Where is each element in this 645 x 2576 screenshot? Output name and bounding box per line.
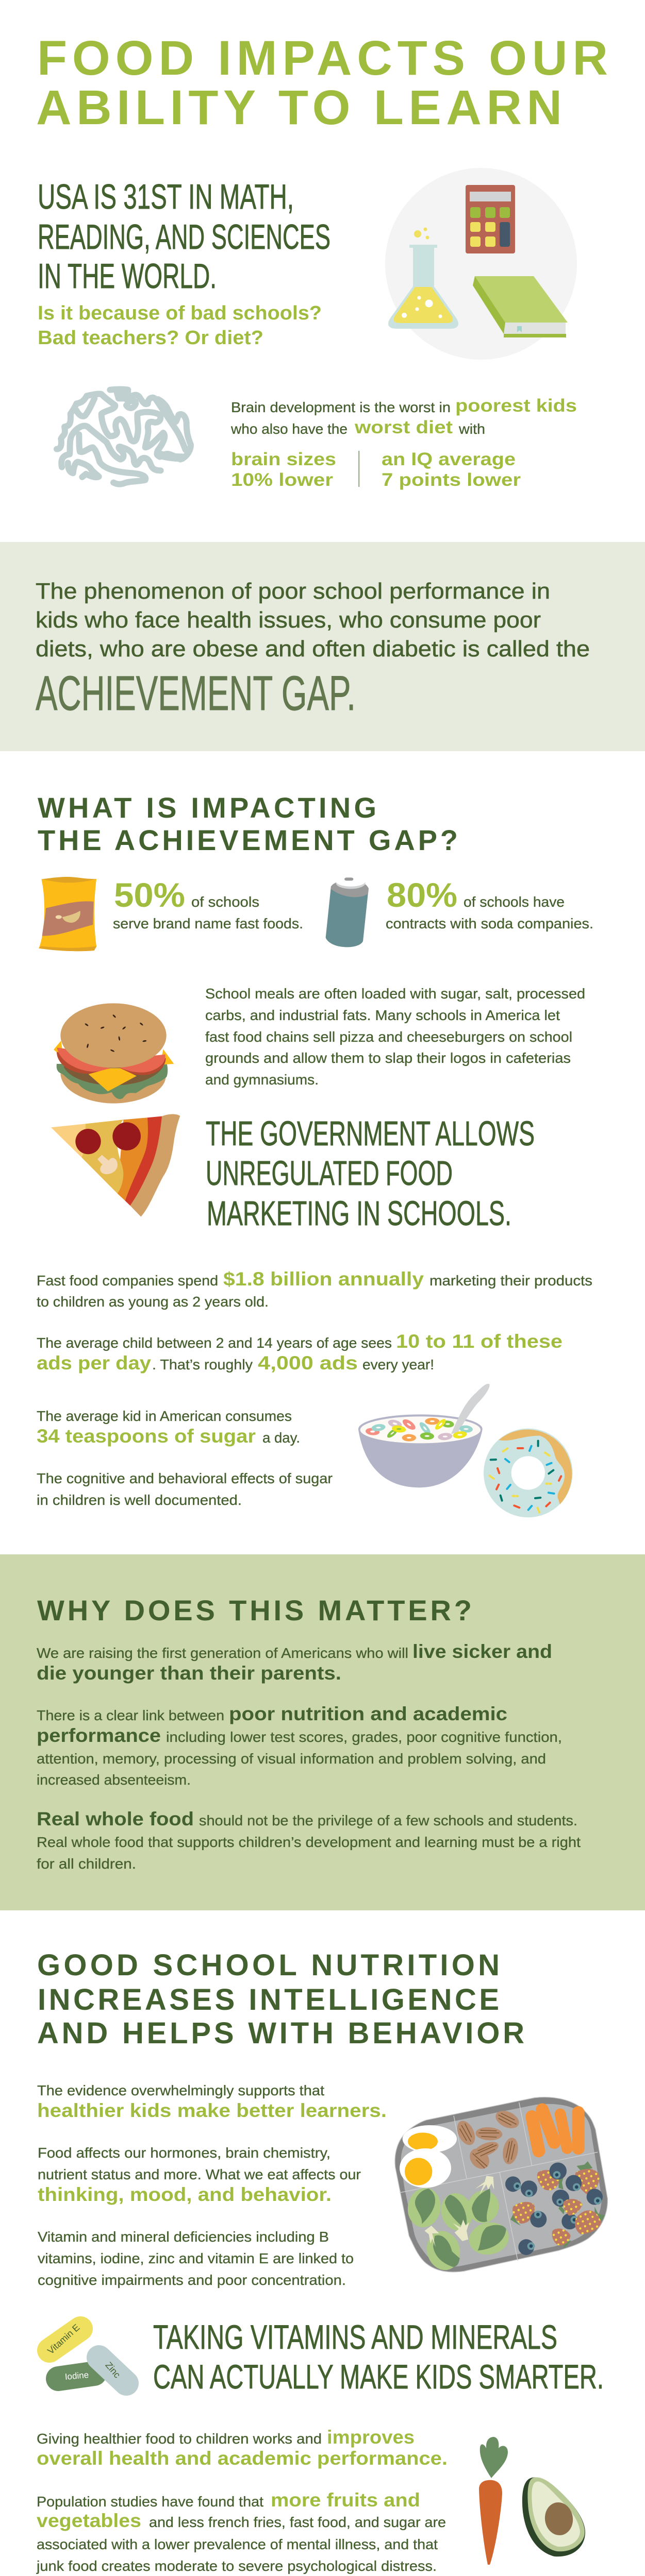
text: food affects: Food affects our hormones, brain chemistry,: [38, 2145, 330, 2161]
icon: eggs: [400, 2125, 457, 2188]
heading: why does this matter: WHY DOES THIS MATTER?: [37, 1594, 472, 1626]
icon: soda can: [326, 876, 369, 947]
text: ads per day: 4,000 ads: [258, 1352, 358, 1374]
text: real whole food: Real whole food: [37, 1808, 194, 1829]
text: healthier food works: [37, 2427, 448, 2469]
text: real whole food: Real whole food that supports children’s development and learning must be a right: [37, 1834, 581, 1850]
heading: what is impacting: THE ACHIEVEMENT GAP?: [38, 824, 458, 856]
text: population studies: associated with a lower prevalence of mental illness, and that: [37, 2536, 438, 2552]
text: nutrition link: performance: [37, 1725, 161, 1746]
text: population studies: more fruits and: [271, 2489, 420, 2511]
text: first generation: [37, 1641, 552, 1684]
text: population studies: [36, 2489, 446, 2574]
icon: lunch tray: [395, 2097, 607, 2274]
stat: 80 percent: of schools have: [464, 894, 565, 910]
text: healthier kids: [37, 2082, 387, 2121]
text: population studies: and less french fries, fast food, and sugar are: [149, 2514, 446, 2530]
icon: avocado: [522, 2477, 585, 2556]
pill: zinc: Zinc: [103, 2360, 123, 2380]
heading: good school nutrition: [37, 1948, 524, 2050]
question text: Is it because of bad schools?: [38, 302, 322, 324]
title: ABILITY TO LEARN: [36, 80, 562, 135]
text: phenomenon description: kids who face health issues, who consume poor: [36, 607, 541, 633]
text: school meals: carbs, and industrial fats. Many schools in America let: [205, 1007, 560, 1023]
text: food affects: thinking, mood, and behavior.: [38, 2184, 332, 2205]
icon: brain: [57, 389, 191, 484]
heading: USA ranking: [38, 177, 330, 296]
text: cognitive effects: [37, 1470, 333, 1508]
icon: flask: [388, 228, 458, 329]
stat: 50 percent: 50%: [114, 876, 185, 914]
text: teaspoons of sugar: [37, 1408, 300, 1447]
heading: good school nutrition: AND HELPS WITH BEHAVIOR: [37, 2016, 524, 2050]
text: brain development: poorest kids: [455, 396, 577, 416]
pill: iodine: Iodine: [64, 2370, 89, 2382]
icon: book: [473, 276, 568, 337]
text: fast food spending: to children as young as 2 years old.: [37, 1294, 269, 1310]
text: fast food spending: Fast food companies spend: [37, 1273, 218, 1289]
text: healthier kids: healthier kids make better learners.: [37, 2100, 387, 2121]
icon: pecans: [454, 2107, 522, 2173]
text: brain development: [230, 396, 577, 437]
pill: vitamin E: Vitamin E: [45, 2322, 82, 2356]
stat: brain sizes: 10% lower: [231, 470, 333, 490]
heading: what is impacting: [38, 791, 458, 856]
text: real whole food: for all children.: [37, 1856, 136, 1872]
text: teaspoons of sugar: a day.: [262, 1430, 300, 1446]
icon: cereal bowl: [358, 1384, 490, 1487]
text: food affects: [38, 2145, 361, 2205]
text: nutrition link: including lower test scores, grades, poor cognitive function,: [166, 1729, 562, 1745]
text: ads per day: [37, 1331, 563, 1374]
text: phenomenon description: [36, 579, 590, 662]
text: nutrition link: There is a clear link between: [37, 1707, 224, 1723]
text: brain development: Brain development is the worst in: [231, 399, 451, 415]
text: deficiencies: cognitive impairments and poor concentration.: [38, 2272, 346, 2288]
stat: 50 percent: [113, 876, 303, 931]
text: ads per day: The average child between 2 and 14 years of age sees: [37, 1335, 392, 1351]
heading: USA ranking: READING, AND SCIENCES: [38, 217, 330, 257]
stat: IQ average: [382, 449, 521, 490]
text: brain development: with: [458, 421, 485, 437]
heading: vitamins and minerals: [153, 2318, 604, 2396]
text: first generation: live sicker and: [412, 1641, 552, 1662]
icon: carrot: [479, 2437, 508, 2565]
pill: zinc: [99, 2358, 126, 2383]
heading: USA ranking: USA IS 31ST IN MATH,: [38, 177, 294, 216]
text: school meals: and gymnasiums.: [205, 1072, 319, 1088]
title: [36, 31, 608, 135]
text: school meals: [205, 986, 585, 1088]
text: first generation: die younger than their parents.: [37, 1663, 341, 1684]
question text: Bad teachers? Or diet?: [38, 327, 263, 349]
icon: brussels sprouts: [405, 2176, 512, 2274]
stat: brain sizes: brain sizes: [231, 449, 336, 469]
heading: government allows: MARKETING IN SCHOOLS.: [207, 1194, 511, 1233]
text: population studies: Population studies have found that: [37, 2494, 263, 2510]
icon: burger: [54, 1003, 174, 1104]
icon: vitamin pills: [45, 2322, 126, 2383]
stat: 80 percent: [386, 876, 593, 931]
heading: government allows: UNREGULATED FOOD: [206, 1154, 453, 1193]
icon: pizza slice: [51, 1114, 180, 1217]
icon: chip bag: [39, 877, 96, 951]
text: school meals: School meals are often loaded with sugar, salt, processed: [205, 986, 585, 1002]
stat: IQ average: 7 points lower: [382, 470, 521, 490]
text: population studies: junk food creates moderate to severe psychological distress.: [36, 2558, 437, 2574]
text: ads per day: . That’s roughly: [152, 1357, 253, 1372]
text: fast food spending: marketing their products: [429, 1273, 592, 1289]
text: brain development: who also have the: [230, 421, 348, 437]
text: food affects: nutrient status and more. What we eat affects our: [38, 2166, 361, 2182]
stat: 50 percent: of schools: [191, 894, 259, 910]
heading: achievement gap: ACHIEVEMENT GAP.: [36, 666, 356, 721]
text: nutrition link: attention, memory, processing of visual information and problem solving, and: [37, 1751, 546, 1767]
panel: why does this matter: [0, 1554, 645, 1910]
text: phenomenon description: diets, who are obese and often diabetic is called the: [36, 636, 590, 662]
icon: donut: [484, 1429, 573, 1517]
text: fast food spending: [37, 1268, 592, 1310]
icon: calculator: [466, 185, 515, 253]
text: healthier food works: overall health and academic performance.: [37, 2448, 448, 2469]
text: cognitive effects: in children is well documented.: [37, 1492, 242, 1508]
text: brain development: worst diet: [354, 417, 453, 437]
icon: school items in circle: [385, 168, 577, 360]
stat: 80 percent: 80%: [387, 876, 457, 914]
heading: good school nutrition: INCREASES INTELLIGENCE: [38, 1983, 499, 2016]
text: healthier kids: The evidence overwhelmingly supports that: [37, 2082, 324, 2098]
text: nutrition link: poor nutrition and academic: [229, 1703, 507, 1724]
text: population studies: vegetables: [37, 2510, 141, 2531]
text: cognitive effects: The cognitive and behavioral effects of sugar: [37, 1470, 333, 1486]
text: healthier food works: improves: [327, 2427, 415, 2448]
panel: achievement gap: [0, 542, 645, 751]
question text: [38, 302, 322, 349]
text: teaspoons of sugar: 34 teaspoons of sugar: [37, 1426, 256, 1447]
stat: 50 percent: serve brand name fast foods.: [113, 916, 303, 931]
text: school meals: grounds and allow them to slap their logos in cafeterias: [205, 1050, 571, 1066]
icon: carrot sticks: [532, 2110, 578, 2151]
text: first generation: We are raising the first generation of Americans who will: [37, 1645, 408, 1661]
text: school meals: fast food chains sell pizza and cheeseburgers on school: [205, 1029, 572, 1045]
heading: USA ranking: IN THE WORLD.: [38, 257, 217, 296]
text: deficiencies: Vitamin and mineral deficiencies including B: [38, 2229, 329, 2245]
text: ads per day: ads per day: [37, 1352, 151, 1374]
title: FOOD IMPACTS OUR: [37, 31, 608, 86]
heading: government allows: [206, 1114, 535, 1233]
text: real whole food: [37, 1808, 581, 1872]
text: deficiencies: [38, 2229, 354, 2288]
heading: good school nutrition: GOOD SCHOOL NUTRITION: [37, 1948, 500, 1982]
text: real whole food: should not be the privilege of a few schools and students.: [199, 1812, 577, 1828]
stat: IQ average: an IQ average: [382, 449, 516, 469]
text: fast food spending: $1.8 billion annually: [223, 1268, 424, 1290]
stat: 80 percent: contracts with soda companies.: [386, 916, 593, 931]
text: healthier food works: Giving healthier food to children works and: [37, 2431, 322, 2447]
icon: strawberries and blueberries: [505, 2161, 605, 2255]
heading: what is impacting: WHAT IS IMPACTING: [38, 791, 376, 824]
text: ads per day: 10 to 11 of these: [396, 1331, 563, 1352]
text: nutrition link: [37, 1703, 562, 1788]
text: phenomenon description: The phenomenon of poor school performance in: [36, 579, 550, 604]
text: nutrition link: increased absenteeism.: [37, 1772, 191, 1788]
text: deficiencies: vitamins, iodine, zinc and vitamin E are linked to: [38, 2250, 354, 2266]
stat: brain sizes: [231, 449, 336, 490]
pill: iodine: [58, 2370, 94, 2382]
text: ads per day: every year!: [362, 1357, 434, 1372]
text: teaspoons of sugar: The average kid in American consumes: [37, 1408, 292, 1424]
